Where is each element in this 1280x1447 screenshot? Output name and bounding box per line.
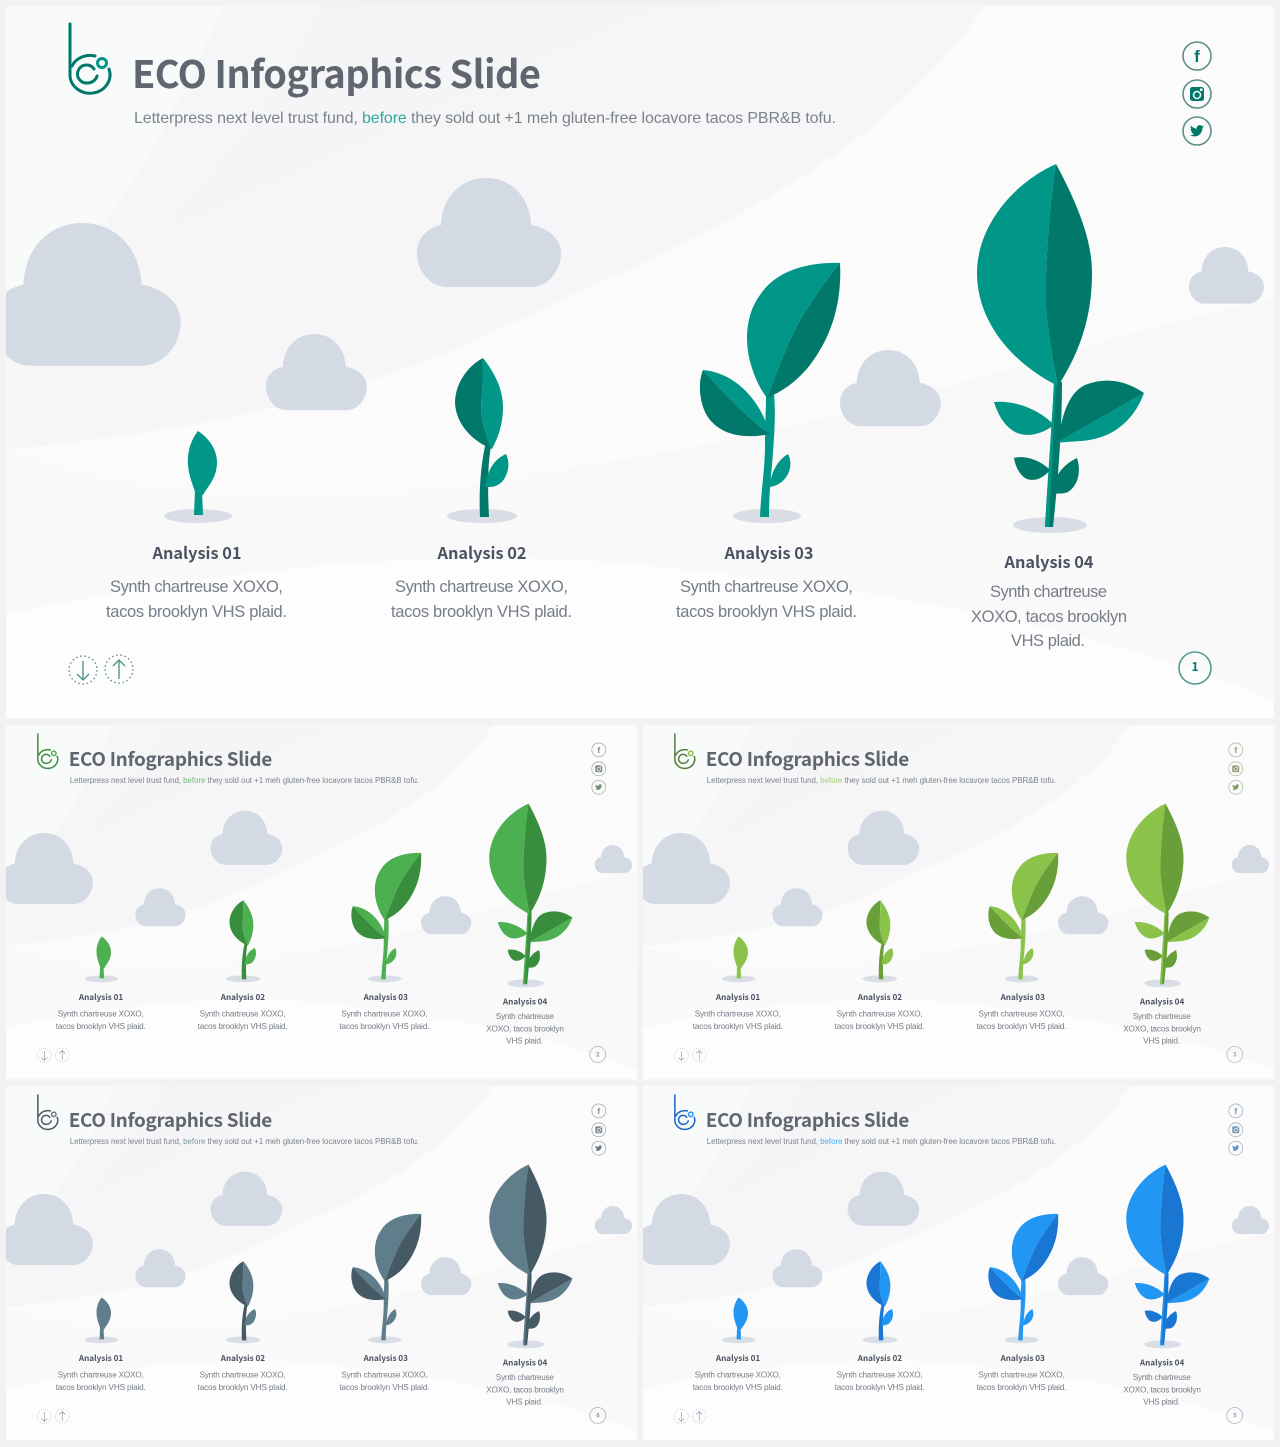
slide 2 labels: tacos brooklyn VHS plaid. <box>198 1022 288 1031</box>
slide 2 labels: Analysis 03 <box>363 992 408 1003</box>
slide 2 page number: 2 <box>596 1049 600 1058</box>
slide 3 page number: 3 <box>1233 1049 1237 1058</box>
slide 2 labels: Analysis 04 <box>502 997 547 1008</box>
slide 2 navigation arrows <box>37 1048 69 1062</box>
slide 2 labels: Synth chartreuse XOXO, <box>58 1010 144 1019</box>
plant 2 <box>447 358 517 523</box>
slide 5 social icons: f <box>1234 1106 1237 1116</box>
slide 5 labels: Analysis 04 <box>1139 1358 1184 1369</box>
slide 5 labels: Analysis 02 <box>857 1353 902 1364</box>
page number <box>1179 652 1211 684</box>
slide 5 page number: 5 <box>1233 1410 1237 1419</box>
slide 5 labels: Synth chartreuse XOXO, <box>837 1371 923 1380</box>
plant 1 <box>164 431 232 523</box>
slide 2 background <box>6 725 637 1079</box>
slide 2 labels: tacos brooklyn VHS plaid. <box>339 1022 430 1031</box>
text: analysis 03 <box>676 540 857 621</box>
slide 4 social icons <box>592 1104 606 1155</box>
slide 5 labels: Synth chartreuse <box>1133 1373 1191 1382</box>
slide 2 labels: Synth chartreuse XOXO, <box>341 1010 428 1019</box>
slide 5 subtitle: Letterpress next level trust fund, before they sold out +1 meh gluten-free locavore tacos PBR&B tofu. <box>707 1137 1056 1146</box>
slide 3 labels: Synth chartreuse XOXO, <box>695 1010 781 1019</box>
text: analysis 01: Analysis 01 <box>152 540 241 564</box>
social icons <box>1183 42 1211 145</box>
slide 3: lime panel <box>636 725 1274 1079</box>
slide 3 labels: Synth chartreuse <box>1133 1012 1191 1021</box>
slide 5 logo <box>675 1095 695 1129</box>
slide 4 labels: Synth chartreuse XOXO, <box>58 1371 144 1380</box>
social icons: f <box>1194 47 1200 66</box>
slide 3 title: ECO Infographics Slide <box>706 745 909 772</box>
slide 4 labels: Analysis 04 <box>502 1358 547 1369</box>
text: analysis 04: Synth chartreuse <box>990 583 1107 601</box>
text: analysis 02 <box>391 540 572 621</box>
slide 3 logo <box>675 734 695 768</box>
slide 3 social icons: f <box>1234 745 1237 755</box>
text: analysis 03: Synth chartreuse XOXO, <box>680 578 853 596</box>
slide 4 page number: 4 <box>596 1410 600 1419</box>
slide 4 subtitle: Letterpress next level trust fund, before they sold out +1 meh gluten-free locavore tacos PBR&B tofu. <box>70 1137 419 1146</box>
slide 3 background <box>643 725 1274 1079</box>
slide 3 labels <box>693 992 1201 1046</box>
slide 4 labels: tacos brooklyn VHS plaid. <box>198 1383 288 1392</box>
slide 5: blue panel <box>636 1086 1274 1440</box>
slide 2 labels <box>56 992 564 1046</box>
navigation arrows <box>69 655 133 684</box>
text: analysis 02: tacos brooklyn VHS plaid. <box>391 603 572 621</box>
slide 2 labels: tacos brooklyn VHS plaid. <box>56 1022 146 1031</box>
slide 3 social icons <box>1229 743 1243 794</box>
slide 5 navigation arrows <box>674 1409 706 1423</box>
slide 3 labels: Analysis 04 <box>1139 997 1184 1008</box>
slide 4 labels: Synth chartreuse XOXO, <box>341 1371 428 1380</box>
text: analysis 04 <box>971 549 1127 650</box>
slide 5 labels: Synth chartreuse XOXO, <box>978 1371 1065 1380</box>
slide 5 labels <box>693 1353 1201 1407</box>
slide 2: green panel <box>0 725 637 1079</box>
slide 4 page number <box>590 1408 606 1423</box>
slide 3 clouds <box>636 811 1269 934</box>
slide 4 labels <box>56 1353 564 1407</box>
slide 4: blue-grey panel <box>0 1086 637 1440</box>
slide 5 title: ECO Infographics Slide <box>706 1106 909 1133</box>
slide 2 social icons: f <box>597 745 600 755</box>
slide 2 subtitle: Letterpress next level trust fund, before they sold out +1 meh gluten-free locavore tacos PBR&B tofu. <box>70 776 419 785</box>
slide 5 labels: Analysis 03 <box>1000 1353 1045 1364</box>
text: analysis 01: Synth chartreuse XOXO, <box>110 578 283 596</box>
slide 4 plants <box>85 1165 572 1348</box>
slide 5 clouds <box>636 1172 1269 1295</box>
slide 2 labels: XOXO, tacos brooklyn <box>486 1025 564 1034</box>
slide 2 labels: Synth chartreuse <box>496 1012 554 1021</box>
slide 1 clouds <box>0 178 1264 426</box>
slide 2 labels: VHS plaid. <box>506 1037 543 1046</box>
slide 4 labels: VHS plaid. <box>506 1398 543 1407</box>
subtitle: Letterpress next level trust fund, before they sold out +1 meh gluten-free locavore tacos PBR&B tofu. <box>134 110 836 127</box>
slide 3 labels: Analysis 01 <box>715 992 760 1003</box>
slide 4 background <box>6 1086 637 1440</box>
slide 2 title: ECO Infographics Slide <box>69 745 272 772</box>
slide 5 labels: tacos brooklyn VHS plaid. <box>693 1383 783 1392</box>
slide 4 labels: Synth chartreuse <box>496 1373 554 1382</box>
slide 5 labels: tacos brooklyn VHS plaid. <box>835 1383 925 1392</box>
slide 5 labels: VHS plaid. <box>1143 1398 1180 1407</box>
text: analysis 03: tacos brooklyn VHS plaid. <box>676 603 857 621</box>
text: analysis 03: Analysis 03 <box>724 540 813 564</box>
title: ECO Infographics Slide <box>132 44 541 99</box>
slide 4 labels: Analysis 01 <box>78 1353 123 1364</box>
slide 3 labels: Analysis 03 <box>1000 992 1045 1003</box>
slide 5 page number <box>1227 1408 1243 1423</box>
text: analysis 04: VHS plaid. <box>1011 632 1085 650</box>
text: analysis 02: Synth chartreuse XOXO, <box>395 578 568 596</box>
text: analysis 04: XOXO, tacos brooklyn <box>971 608 1127 626</box>
slide 4 labels: XOXO, tacos brooklyn <box>486 1386 564 1395</box>
slide 5 labels: Synth chartreuse XOXO, <box>695 1371 781 1380</box>
slide 3 labels: VHS plaid. <box>1143 1037 1180 1046</box>
slide 4 labels: Analysis 02 <box>220 1353 265 1364</box>
slide 4 logo <box>38 1095 58 1129</box>
slide 4 labels: Analysis 03 <box>363 1353 408 1364</box>
slide 2 labels: Analysis 01 <box>78 992 123 1003</box>
slide 3 page number <box>1227 1047 1243 1062</box>
slide 2 labels: Synth chartreuse XOXO, <box>200 1010 286 1019</box>
page number: 1 <box>1191 658 1199 675</box>
slide 4 labels: Synth chartreuse XOXO, <box>200 1371 286 1380</box>
slide 1 background <box>6 6 1274 718</box>
slide 3 plants <box>722 804 1209 987</box>
slide 2 clouds <box>0 811 632 934</box>
slide 3 labels: Synth chartreuse XOXO, <box>837 1010 923 1019</box>
slide 5 background <box>643 1086 1274 1440</box>
slide 2 plants <box>85 804 572 987</box>
slide 4 labels: tacos brooklyn VHS plaid. <box>56 1383 146 1392</box>
logo <box>70 24 110 93</box>
slide 4 navigation arrows <box>37 1409 69 1423</box>
slide 5 social icons <box>1229 1104 1243 1155</box>
slide 5 labels: XOXO, tacos brooklyn <box>1123 1386 1201 1395</box>
slide 3 labels: XOXO, tacos brooklyn <box>1123 1025 1201 1034</box>
slide 2 page number <box>590 1047 606 1062</box>
slide 3 labels: tacos brooklyn VHS plaid. <box>693 1022 783 1031</box>
text: analysis 01 <box>106 540 287 621</box>
slide 3 subtitle: Letterpress next level trust fund, before they sold out +1 meh gluten-free locavore tacos PBR&B tofu. <box>707 776 1056 785</box>
slide 3 navigation arrows <box>674 1048 706 1062</box>
slide 3 labels: Synth chartreuse XOXO, <box>978 1010 1065 1019</box>
slide 3 labels: tacos brooklyn VHS plaid. <box>976 1022 1067 1031</box>
slide 3 labels: Analysis 02 <box>857 992 902 1003</box>
slide 5 plants <box>722 1165 1209 1348</box>
slide 4 clouds <box>0 1172 632 1295</box>
slide 2 labels: Analysis 02 <box>220 992 265 1003</box>
plant 4 <box>977 164 1144 533</box>
slide 4 labels: tacos brooklyn VHS plaid. <box>339 1383 430 1392</box>
slide 5 labels: tacos brooklyn VHS plaid. <box>976 1383 1067 1392</box>
slide 3 labels: tacos brooklyn VHS plaid. <box>835 1022 925 1031</box>
slide 4 title: ECO Infographics Slide <box>69 1106 272 1133</box>
plant 3 <box>700 263 840 523</box>
slide 1: teal main panel <box>0 6 1274 718</box>
slide 5 labels: Analysis 01 <box>715 1353 760 1364</box>
text: analysis 01: tacos brooklyn VHS plaid. <box>106 603 287 621</box>
text: analysis 02: Analysis 02 <box>437 540 526 564</box>
text: analysis 04: Analysis 04 <box>1004 549 1094 573</box>
slide 4 social icons: f <box>597 1106 600 1116</box>
slide 2 logo <box>38 734 58 768</box>
slide 2 social icons <box>592 743 606 794</box>
